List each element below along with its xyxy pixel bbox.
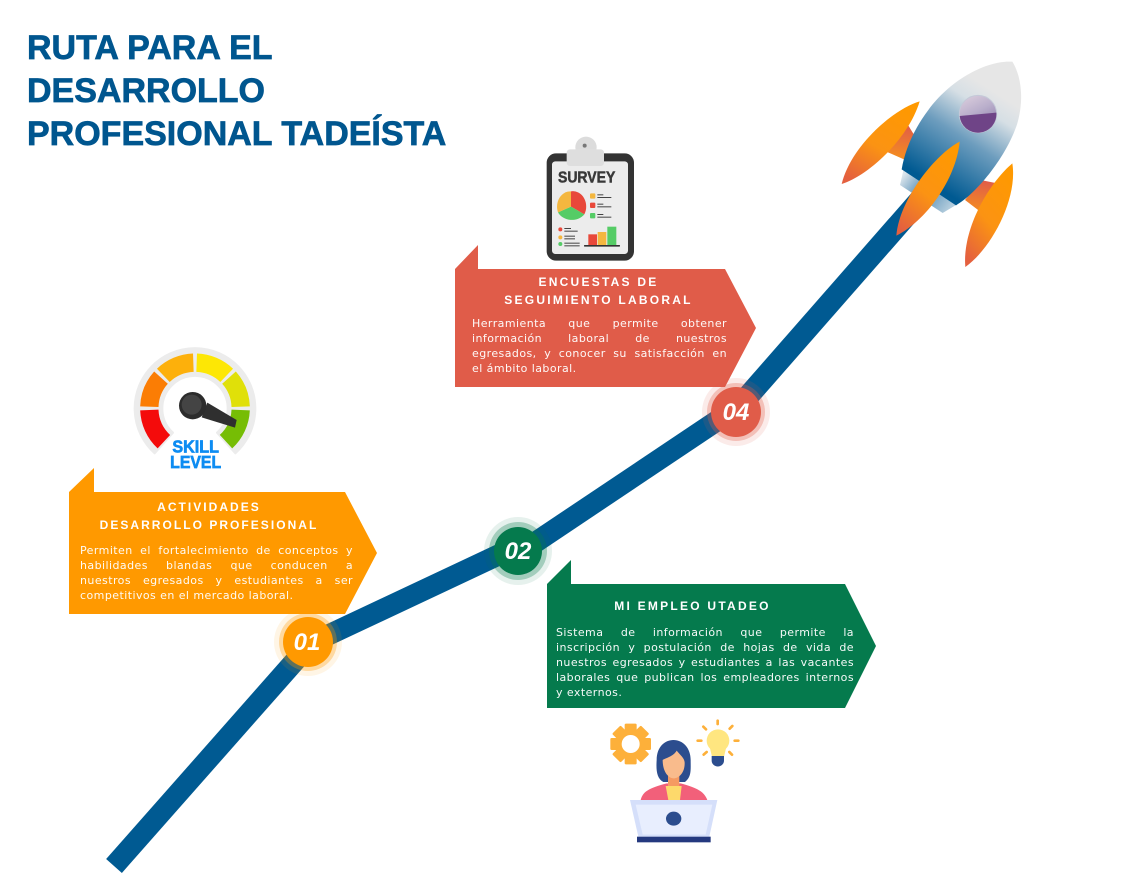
marker 01 bbox=[274, 608, 342, 676]
rocket base bbox=[900, 171, 956, 213]
laptop bbox=[630, 800, 717, 842]
body text: inscripción y postulación de hojas de vida de bbox=[556, 641, 854, 654]
title: RUTA PARA EL bbox=[27, 29, 273, 67]
marker 01: 01 bbox=[294, 629, 320, 656]
body text: nuestros egresados y estudiantes a ser bbox=[80, 574, 353, 587]
gauge label bbox=[170, 436, 222, 472]
body text bbox=[556, 626, 854, 699]
rocket centre fin bbox=[896, 142, 960, 236]
survey label: SURVEY bbox=[558, 170, 616, 187]
heading: ENCUESTAS DE bbox=[538, 275, 659, 289]
rocket left strut bbox=[883, 124, 916, 159]
title bbox=[27, 29, 446, 153]
rocket body bbox=[902, 62, 1021, 205]
legend squares bbox=[590, 193, 611, 218]
panel: encuestas de seguimiento laboral bbox=[455, 245, 756, 387]
title: DESARROLLO bbox=[27, 72, 265, 110]
icon: skill level gauge bbox=[135, 348, 255, 472]
body text bbox=[80, 544, 353, 602]
heading: ACTIVIDADES bbox=[157, 500, 261, 514]
body text: información laboral de nuestros bbox=[472, 332, 727, 345]
rocket left fin bbox=[842, 101, 920, 184]
icon: person at laptop with gear and bulb bbox=[610, 721, 738, 842]
heading bbox=[504, 275, 693, 307]
clip bbox=[567, 137, 604, 166]
person bbox=[641, 740, 707, 800]
gauge needle bbox=[179, 392, 237, 428]
marker 02 bbox=[484, 517, 552, 585]
rocket right fin bbox=[965, 163, 1013, 267]
rocket right strut bbox=[965, 180, 997, 214]
body text: Herramienta que permite obtener bbox=[472, 317, 727, 330]
panel: actividades desarrollo profesional bbox=[69, 468, 377, 614]
gauge label: LEVEL bbox=[170, 452, 222, 472]
rocket bbox=[842, 62, 1021, 267]
body text bbox=[472, 317, 727, 375]
body text: egresados, y conocer su satisfacción en bbox=[472, 347, 727, 360]
rising route line bbox=[114, 200, 920, 866]
body text: competitivos en el mercado laboral. bbox=[80, 589, 294, 602]
bar chart bbox=[584, 227, 620, 247]
body text: habilidades blandas que conducen a bbox=[80, 559, 353, 572]
body text: y externos. bbox=[556, 686, 622, 699]
title: PROFESIONAL TADEÍSTA bbox=[27, 115, 446, 153]
body text: nuestros egresados y estudiantes a las vacantes bbox=[556, 656, 854, 669]
panel: mi empleo utadeo bbox=[547, 560, 876, 708]
body text: laborales que publican los empleadores internos bbox=[556, 671, 854, 684]
icon: survey clipboard bbox=[547, 137, 634, 261]
body text: el ámbito laboral. bbox=[472, 362, 577, 375]
gauge label: SKILL bbox=[172, 436, 219, 456]
pie chart bbox=[557, 191, 586, 220]
heading bbox=[100, 500, 318, 532]
heading: DESARROLLO PROFESIONAL bbox=[100, 518, 318, 532]
rocket window bbox=[959, 95, 997, 133]
body text: Sistema de información que permite la bbox=[556, 626, 854, 639]
marker 02: 02 bbox=[505, 538, 532, 565]
body text: Permiten el fortalecimiento de conceptos y bbox=[80, 544, 353, 557]
legend dots bbox=[558, 227, 580, 246]
light bulb bbox=[698, 721, 738, 766]
heading: SEGUIMIENTO LABORAL bbox=[504, 293, 693, 307]
gear bbox=[610, 724, 651, 764]
marker 04: 04 bbox=[723, 399, 749, 426]
heading: MI EMPLEO UTADEO bbox=[614, 599, 771, 613]
marker 04 bbox=[702, 378, 770, 446]
